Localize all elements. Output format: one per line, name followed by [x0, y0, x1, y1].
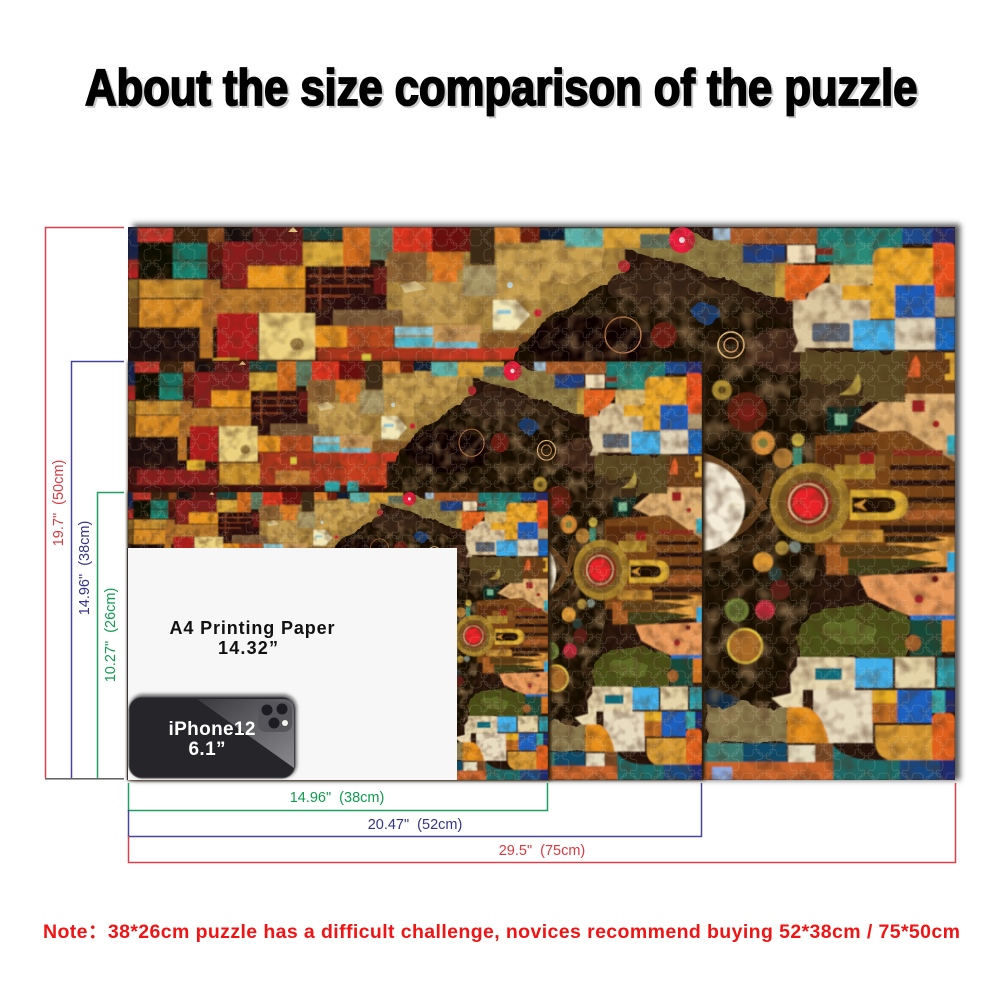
title: About the size comparison of the puzzle [87, 62, 919, 119]
height bracket: 10.27 inch [98, 492, 124, 778]
iPhone12 [129, 694, 297, 778]
A4 paper: A4 Printing Paper [170, 618, 334, 638]
height bracket: 19.7 inch: 19.7" (50cm) [51, 460, 67, 546]
drop shadow of medium puzzle [128, 361, 705, 780]
baseline of height brackets [45, 778, 124, 780]
title: About the size comparison of the puzzle [85, 60, 917, 117]
height bracket: 14.96 inch: 14.96" (38cm) [77, 521, 93, 615]
width bracket: 29.5 inch [128, 783, 956, 862]
puzzle: medium 52x38cm [128, 361, 702, 780]
A4 paper: 14.32” [218, 638, 278, 658]
width bracket: 14.96 inch: 14.96" (38cm) [290, 790, 384, 806]
width bracket: 29.5 inch: 29.5" (75cm) [499, 843, 585, 859]
A4 paper [127, 548, 457, 780]
height bracket: 19.7 inch [46, 228, 124, 778]
width bracket: 20.47 inch: 20.47" (52cm) [368, 817, 462, 833]
iPhone12: 6.1” [188, 739, 226, 760]
note: Note：38*26cm puzzle has a difficult challenge, novices recommend buying 52*38cm / 75*50cm [43, 921, 960, 943]
drop shadow of large puzzle [133, 224, 960, 780]
puzzle: large 75x50cm [128, 227, 955, 780]
height bracket: 14.96 inch [72, 362, 124, 778]
width bracket: 14.96 inch [128, 783, 548, 810]
height bracket: 10.27 inch: 10.27" (26cm) [103, 588, 119, 682]
puzzle: small 38x26cm [128, 492, 548, 780]
iPhone12: iPhone12 [168, 719, 256, 740]
drop shadow of small puzzle [128, 492, 551, 780]
width bracket: 20.47 inch [128, 783, 702, 836]
